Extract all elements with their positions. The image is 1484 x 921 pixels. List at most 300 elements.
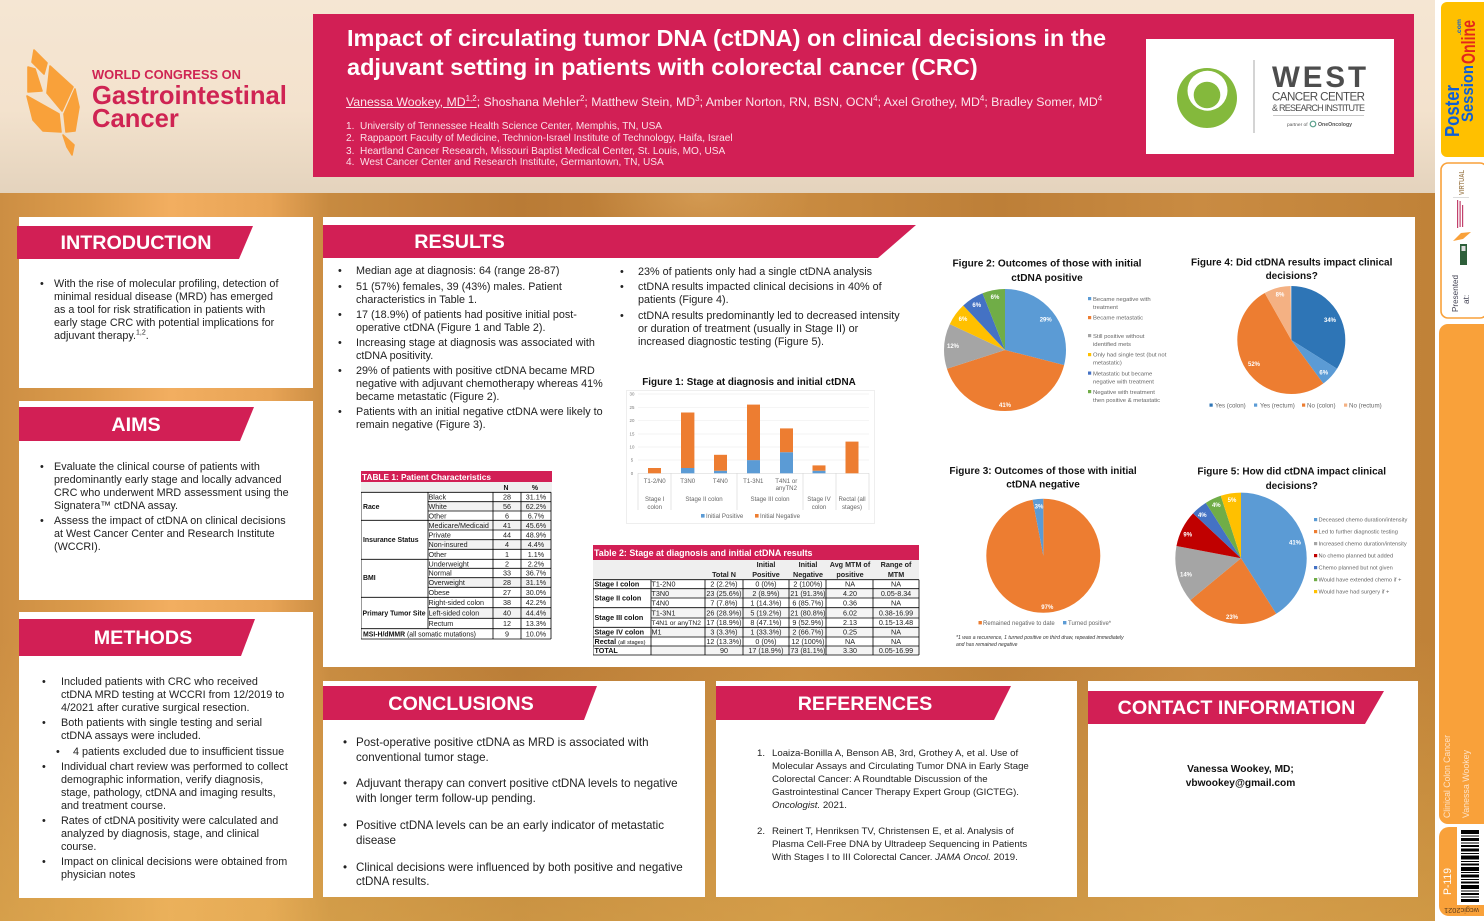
- table 1: patient characteristics: Black: [428, 493, 446, 502]
- text: results left column: ctDNA positivity.: [356, 350, 433, 362]
- logo text: Gastrointestinal: [92, 82, 287, 110]
- chart: figure 3 pie: and has remained negative: [956, 642, 1018, 648]
- chart: figure 1 stacked bars: T1-3N1: [743, 478, 764, 485]
- logo: World Congress on Gastrointestinal Cancer: [26, 49, 287, 156]
- table 1: patient characteristics: Right-sided colon: [428, 598, 484, 607]
- chart: figure 1 stacked bars: 5: [631, 458, 634, 462]
- table 2: stage at diagnosis and initial ctDNA results: Initial: [757, 560, 775, 569]
- chart: figure 4 pie: No (colon): [1307, 402, 1336, 409]
- text: methods: •: [42, 856, 46, 868]
- text: conclusions: Positive ctDNA levels can be an early indicator of metastatic: [356, 819, 664, 832]
- text: results left column: •: [338, 406, 342, 418]
- chart: figure 1 stacked bars: T3N0: [680, 478, 696, 485]
- chart: figure 4 pie: Yes (colon): [1215, 402, 1246, 409]
- affiliations: [346, 121, 733, 168]
- chart: figure 2 pie: identified mets: [1093, 342, 1131, 348]
- table 1: patient characteristics: 4: [505, 540, 509, 549]
- text: references: Colorectal Cancer: A Roundtable Discussion of the: [772, 774, 988, 785]
- top banner background: [0, 0, 1484, 193]
- tab: poster session online: Session: [1458, 65, 1477, 122]
- table 1: patient characteristics: Insurance Status: [363, 537, 419, 544]
- table 1: patient characteristics: Other: [428, 511, 447, 520]
- chart: figure 1 stacked bars: 25: [630, 405, 635, 410]
- chart: figure 4 pie: 6%: [1319, 370, 1329, 376]
- table 1: patient characteristics: N: [504, 485, 509, 492]
- table 2: stage at diagnosis and initial ctDNA results: 0.38-16.99: [879, 608, 913, 617]
- chart: figure 5 pie: 14%: [1180, 572, 1193, 578]
- text: contact details: vbwookey@gmail.com: [1186, 778, 1295, 789]
- text: methods: [42, 676, 288, 881]
- text: results left column: negative with adjuvant chemotherapy whereas 41%: [356, 378, 603, 390]
- title: adjuvant setting in patients with colorectal cancer (CRC): [347, 54, 978, 80]
- text: contact details: [1186, 764, 1295, 789]
- table 2: stage at diagnosis and initial ctDNA results: M1: [652, 628, 662, 637]
- text: methods: •: [42, 717, 46, 729]
- table 2: stage at diagnosis and initial ctDNA results: 1 (14.3%): [750, 598, 782, 607]
- table 2: stage at diagnosis and initial ctDNA results: Positive: [752, 570, 780, 579]
- chart: figure 2 pie: 12%: [947, 344, 960, 350]
- text: conclusions: ctDNA results.: [356, 875, 429, 888]
- table 2: stage at diagnosis and initial ctDNA results: 2 (66.7%): [792, 628, 824, 637]
- text: results left column: characteristics in Table 1.: [356, 294, 477, 306]
- chart: figure 5 pie: Chemo planned but not given: [1318, 566, 1393, 572]
- chart: figure 3 pie: [949, 466, 1137, 648]
- text: methods: •: [42, 676, 46, 688]
- text: results left column: operative ctDNA (Figure 1 and Table 2).: [356, 322, 545, 334]
- table 2: stage at diagnosis and initial ctDNA results: T4N1 or anyTN2: [652, 620, 701, 627]
- table 2: stage at diagnosis and initial ctDNA results: 3.30: [843, 646, 857, 655]
- text: introduction: With the rise of molecular profiling, detection of: [54, 278, 278, 290]
- table 2: stage at diagnosis and initial ctDNA results: 0.05-8.34: [881, 589, 911, 598]
- chart: figure 2 pie: [944, 258, 1167, 411]
- chart: figure 3 pie: 97%: [1041, 605, 1054, 611]
- chart: figure 1 stacked bars: 15: [630, 432, 635, 436]
- chart: figure 5 pie: decisions?: [1266, 481, 1318, 492]
- table 2: stage at diagnosis and initial ctDNA results: 1 (33.3%): [750, 628, 782, 637]
- table 1: patient characteristics: Race: [363, 504, 380, 511]
- table 2: stage at diagnosis and initial ctDNA results: 4.20: [843, 589, 857, 598]
- table 1: patient characteristics: 48.9%: [526, 530, 547, 540]
- table 1: patient characteristics: Other: [428, 550, 447, 559]
- text: references: [757, 748, 1029, 863]
- text: results left column: Patients with an initial negative ctDNA were likely to: [356, 406, 603, 418]
- table 2: stage at diagnosis and initial ctDNA results: MTM: [888, 570, 904, 579]
- text: references: 1.: [757, 748, 765, 759]
- table 1: patient characteristics: 41: [503, 521, 511, 530]
- table 1: patient characteristics: 1.1%: [528, 550, 545, 559]
- table 1: patient characteristics: 38: [503, 598, 511, 607]
- table 2: stage at diagnosis and initial ctDNA results: NA: [891, 628, 901, 637]
- table 2: stage at diagnosis and initial ctDNA results: NA: [845, 580, 855, 589]
- text: methods: analyzed by diagnosis, stage, and clinical: [61, 828, 259, 840]
- text: conclusions: with longer term follow-up pending.: [356, 792, 536, 804]
- table 2: stage at diagnosis and initial ctDNA results: 8 (47.1%): [750, 618, 782, 627]
- heading: introduction: INTRODUCTION: [61, 232, 211, 254]
- table 2: stage at diagnosis and initial ctDNA results: 2 (2.2%): [710, 580, 738, 589]
- logo: West Cancer Center: WEST: [1272, 61, 1366, 94]
- tab: poster session online: Poster: [1442, 85, 1464, 137]
- chart: figure 2 pie: Figure 2: Outcomes of those with initial: [952, 258, 1142, 270]
- table 1: patient characteristics: 28: [503, 493, 511, 502]
- heading: contact information: CONTACT INFORMATION: [1118, 697, 1355, 719]
- text: aims: Assess the impact of ctDNA on clinical decisions: [54, 515, 286, 527]
- text: references: With Stages I to III Colorectal Cancer. JAMA Oncol. 2019.: [772, 852, 1018, 863]
- affiliations: 4. West Cancer Center and Research Institute, Germantown, TN, USA: [346, 157, 664, 168]
- chart legend: Initial Negative: [760, 513, 801, 520]
- chart: figure 4 pie: Figure 4: Did ctDNA results impact clinical: [1191, 258, 1393, 268]
- table 1: patient characteristics: Obese: [428, 588, 450, 597]
- text: references: Gastrointestinal Cancer Therapy Expert Group (GICTEG).: [772, 787, 1019, 798]
- chart: figure 2 pie: Became metastatic: [1093, 316, 1143, 322]
- table 1: patient characteristics: 31.1%: [526, 493, 547, 502]
- table 1: patient characteristics: 36.7%: [526, 569, 547, 578]
- chart: figure 4 pie: No (rectum): [1349, 402, 1382, 409]
- chart: figure 5 pie: Would have extended chemo if +: [1318, 578, 1402, 584]
- chart: figure 4 pie: 34%: [1324, 318, 1337, 324]
- table 2: stage at diagnosis and initial ctDNA results: 0.25: [843, 628, 857, 637]
- table 2: stage at diagnosis and initial ctDNA results: 26 (28.9%): [706, 608, 742, 617]
- text: methods: ctDNA assays were included.: [61, 730, 201, 742]
- chart: figure 5 pie: 4%: [1198, 513, 1207, 519]
- table 1: patient characteristics: Primary Tumor Site: [362, 610, 426, 618]
- text: introduction: [40, 278, 278, 342]
- table 2: stage at diagnosis and initial ctDNA results: 12 (13.3%): [706, 637, 742, 646]
- text: introduction: as a tool for risk stratification in patients with: [54, 304, 265, 316]
- table 1: patient characteristics: 30.0%: [526, 588, 547, 597]
- text: references: Reinert T, Henriksen TV, Christensen E, et al. Analysis of: [772, 826, 1014, 837]
- table 1: patient characteristics: Medicare/Medicaid: [428, 521, 489, 530]
- text: results right column: 23% of patients only had a single ctDNA analysis: [638, 266, 872, 278]
- chart: figure 1 stacked bars: [626, 377, 875, 524]
- panel: aims: [19, 401, 313, 600]
- tab: poster number and barcode: wcgic2021: [1444, 906, 1480, 915]
- table 1: patient characteristics: 4.4%: [528, 540, 545, 549]
- table 2: stage at diagnosis and initial ctDNA results: [593, 545, 920, 656]
- table 2: stage at diagnosis and initial ctDNA results: NA: [891, 580, 901, 589]
- chart: figure 5 pie: [1175, 466, 1408, 624]
- text: methods: 4/2021 after curative surgical resection.: [61, 702, 249, 714]
- logo: West Cancer Center: CANCER CENTER: [1272, 90, 1365, 104]
- table 2: stage at diagnosis and initial ctDNA results: 7 (7.8%): [710, 598, 738, 607]
- text: results right column: increased diagnostic testing (Figure 5).: [638, 336, 824, 348]
- heading: conclusions: CONCLUSIONS: [388, 693, 534, 715]
- text: results left column: became metastatic (Figure 2).: [356, 391, 499, 403]
- table 2: stage at diagnosis and initial ctDNA results: Table 2: Stage at diagnosis and initial ctDNA results: [594, 548, 813, 558]
- table 1: patient characteristics: MSI-H/dMMR (all somatic mutations): [363, 631, 476, 638]
- chart: figure 2 pie: 6%: [991, 295, 1000, 301]
- text: references: Plasma Cell-Free DNA by Ultradeep Sequencing in Patients: [772, 839, 1027, 850]
- text: conclusions: •: [343, 777, 347, 790]
- table 2: stage at diagnosis and initial ctDNA results: 0 (0%): [755, 637, 777, 646]
- chart legend: [701, 513, 801, 520]
- chart: figure 2 pie: treatment: [1093, 305, 1118, 311]
- table 1: patient characteristics: 45.6%: [526, 521, 547, 530]
- table 1: patient characteristics: 6.7%: [528, 511, 545, 520]
- tab: presented at virtual congress: at:: [1461, 295, 1471, 304]
- table 2: stage at diagnosis and initial ctDNA results: NA: [845, 637, 855, 646]
- text: conclusions: disease: [356, 834, 396, 846]
- table 2: stage at diagnosis and initial ctDNA results: 6 (85.7%): [792, 598, 824, 607]
- chart: figure 1 stacked bars: T4N0: [713, 478, 728, 485]
- table 1: patient characteristics: 56: [503, 502, 511, 511]
- table 1: patient characteristics: Non-insured: [428, 540, 468, 549]
- table 2: stage at diagnosis and initial ctDNA results: NA: [891, 598, 901, 607]
- table 2: stage at diagnosis and initial ctDNA results: Stage I colon: [594, 580, 639, 589]
- text: session and author: Vanessa Wookey: [1461, 750, 1472, 818]
- logo: West Cancer Center: [1146, 39, 1394, 154]
- chart: figure 2 pie: Became negative with: [1093, 297, 1151, 303]
- table 1: patient characteristics: 28: [503, 578, 511, 587]
- table 2: stage at diagnosis and initial ctDNA results: TOTAL: [594, 646, 618, 655]
- table 2: stage at diagnosis and initial ctDNA results: 23 (25.6%): [706, 589, 742, 598]
- logo: West Cancer Center: OneOncology: [1318, 122, 1352, 128]
- table 2: stage at diagnosis and initial ctDNA results: NA: [891, 637, 901, 646]
- chart: figure 1 stacked bars: 0: [631, 471, 634, 476]
- chart: figure 5 pie: 4%: [1212, 503, 1221, 509]
- title: Impact of circulating tumor DNA (ctDNA) on clinical decisions in the: [347, 25, 1106, 51]
- chart: figure 5 pie: Figure 5: How did ctDNA impact clinical: [1197, 466, 1386, 478]
- chart: figure 3 pie: Remained negative to date: [983, 621, 1055, 627]
- text: results right column: patients (Figure 4).: [638, 294, 729, 306]
- table 1: patient characteristics: 44: [503, 530, 511, 540]
- chart: figure 1 stacked bars: T1-2/N0: [644, 478, 666, 485]
- panel: results: [323, 217, 1415, 667]
- text: conclusions: •: [343, 736, 347, 749]
- table 2: stage at diagnosis and initial ctDNA results: Stage IV colon: [594, 628, 644, 637]
- table 2: stage at diagnosis and initial ctDNA results: Stage II colon: [594, 594, 641, 602]
- table 1: patient characteristics: TABLE 1: Patient Characteristics: [362, 472, 491, 482]
- panel: references: [716, 681, 1077, 897]
- chart: figure 1 stacked bars: 30: [630, 392, 635, 396]
- chart: figure 3 pie: Turned positive*: [1068, 621, 1112, 627]
- logo: West Cancer Center: partner of: [1287, 122, 1308, 128]
- table 2: stage at diagnosis and initial ctDNA results: Avg MTM of: [830, 560, 871, 569]
- text: aims: (WCCRI).: [54, 541, 101, 553]
- table 2: stage at diagnosis and initial ctDNA results: 0.36: [843, 598, 857, 607]
- heading: aims: [19, 407, 254, 441]
- chart: figure 5 pie: Deceased chemo duration/intensity: [1318, 518, 1407, 524]
- text: conclusions: [343, 736, 683, 888]
- table 2: stage at diagnosis and initial ctDNA results: 6.02: [843, 608, 857, 617]
- title: [347, 25, 1106, 80]
- text: aims: Evaluate the clinical course of patients with: [54, 461, 260, 473]
- text: aims: [40, 461, 289, 553]
- chart: figure 4 pie: 8%: [1276, 292, 1285, 298]
- title banner: [313, 14, 1414, 177]
- table 2: stage at diagnosis and initial ctDNA results: 9 (52.9%): [792, 618, 824, 627]
- table 2: stage at diagnosis and initial ctDNA results: 2 (100%): [793, 580, 823, 589]
- chart: figure 2 pie: metastatic): [1093, 361, 1122, 367]
- text: session and author: [1442, 734, 1472, 818]
- chart: figure 1 stacked bars: Stage II colon: [685, 496, 723, 503]
- chart: figure 2 pie: 6%: [972, 303, 982, 309]
- table 1: patient characteristics: %: [532, 485, 538, 492]
- chart: figure 1 stacked bars: Rectal (all: [838, 496, 866, 503]
- text: aims: at West Cancer Center and Research Institute: [54, 528, 275, 540]
- sidebar: [1435, 0, 1484, 921]
- panel: conclusions: [323, 681, 705, 897]
- text: methods: •: [42, 815, 46, 827]
- text: aims: Signatera™ ctDNA assay.: [54, 500, 178, 512]
- table 2: stage at diagnosis and initial ctDNA results: T1-3N1: [652, 608, 675, 617]
- table 1: patient characteristics: 2.2%: [528, 559, 545, 568]
- text: results left column: •: [338, 337, 342, 349]
- chart: figure 5 pie: Led to further diagnostic testing: [1318, 530, 1398, 536]
- text: results right column: or duration of treatment (usually in Stage II) or: [638, 323, 858, 335]
- table 2: stage at diagnosis and initial ctDNA results: T3N0: [652, 589, 669, 598]
- table 1: patient characteristics: 40: [503, 608, 511, 618]
- table 1: patient characteristics: 27: [503, 588, 511, 597]
- table 2: stage at diagnosis and initial ctDNA results: 0.15-13.48: [879, 618, 913, 627]
- table 2: stage at diagnosis and initial ctDNA results: 90: [720, 646, 728, 655]
- table 2: stage at diagnosis and initial ctDNA results: 21 (80.8%): [790, 608, 826, 617]
- chart: figure 1 stacked bars: Stage III colon: [751, 496, 789, 503]
- text: results right column: •: [620, 310, 624, 322]
- table 2: stage at diagnosis and initial ctDNA results: 21 (91.3%): [790, 589, 826, 598]
- chart: figure 1 stacked bars: T4N1 or: [775, 478, 797, 485]
- table 2: stage at diagnosis and initial ctDNA results: T1-2N0: [652, 580, 675, 589]
- table 1: patient characteristics: Underweight: [428, 559, 469, 568]
- text: methods: Impact on clinical decisions were obtained from: [61, 856, 287, 868]
- chart: figure 2 pie: Only had single test (but not: [1093, 353, 1167, 359]
- text: results left column: [338, 265, 603, 431]
- heading: results: [323, 225, 916, 258]
- text: introduction: •: [40, 278, 44, 290]
- affiliations: 2. Rappaport Faculty of Medicine, Technion-Israel Institute of Technology, Haifa, Israel: [346, 133, 733, 144]
- text: aims: predominantly early stage and locally advanced: [54, 474, 281, 486]
- table 1: patient characteristics: Private: [428, 530, 451, 540]
- text: results left column: 29% of patients with positive ctDNA became MRD: [356, 365, 595, 377]
- table 2: stage at diagnosis and initial ctDNA results: 0 (0%): [755, 580, 777, 589]
- heading: references: [716, 686, 1011, 720]
- text: results right column: •: [620, 266, 624, 278]
- table 1: patient characteristics: 2: [505, 559, 509, 568]
- text: methods: and treatment course.: [61, 800, 166, 812]
- text: contact details: Vanessa Wookey, MD;: [1187, 764, 1294, 775]
- table 1: patient characteristics: Overweight: [428, 578, 465, 587]
- text: methods: physician notes: [61, 869, 135, 881]
- chart: figure 5 pie: 23%: [1226, 615, 1239, 621]
- table 2: stage at diagnosis and initial ctDNA results: 2.13: [843, 618, 857, 627]
- chart: figure 1 stacked bars: colon: [812, 504, 826, 511]
- table 1: patient characteristics: Normal: [428, 569, 452, 578]
- tab: poster session online: .com: [1457, 19, 1463, 35]
- table 2: stage at diagnosis and initial ctDNA results: 17 (18.9%): [706, 618, 742, 627]
- text: methods: 4 patients excluded due to insufficient tissue: [73, 746, 284, 758]
- text: references: Loaiza-Bonilla A, Benson AB, 3rd, Grothey A, et al. Use of: [772, 748, 1018, 759]
- table 2: stage at diagnosis and initial ctDNA results: Rectal (all stages): [594, 637, 646, 646]
- chart: figure 2 pie: negative with treatment: [1093, 379, 1154, 385]
- table 1: patient characteristics: 1: [505, 550, 509, 559]
- table 2: stage at diagnosis and initial ctDNA results: T4N0: [652, 598, 669, 607]
- text: introduction: minimal residual disease (MRD) has emerged: [54, 291, 273, 303]
- chart: figure 1 stacked bars: 10: [630, 444, 635, 450]
- icon: orange leaf: [26, 49, 80, 156]
- chart: figure 4 pie: 52%: [1248, 362, 1261, 368]
- heading: contact information: [1088, 691, 1384, 724]
- chart: figure 2 pie: Still positive without: [1093, 334, 1145, 340]
- table 2: stage at diagnosis and initial ctDNA results: Negative: [793, 570, 823, 579]
- table 1: patient characteristics: 12: [503, 619, 511, 628]
- table 1: patient characteristics: 44.4%: [526, 608, 547, 618]
- heading: aims: AIMS: [111, 414, 161, 436]
- chart: figure 5 pie: 9%: [1183, 532, 1193, 538]
- text: conclusions: Adjuvant therapy can convert positive ctDNA levels to negative: [356, 777, 678, 790]
- chart: figure 1 stacked bars: 20: [630, 418, 635, 423]
- chart: figure 2 pie: 41%: [999, 403, 1012, 409]
- text: methods: Individual chart review was performed to collect: [61, 761, 288, 773]
- text: results right column: [620, 266, 900, 348]
- table 2: stage at diagnosis and initial ctDNA results: 5 (19.2%): [750, 608, 782, 617]
- text: conclusions: •: [343, 819, 347, 832]
- chart title: Figure 1: Stage at diagnosis and initial ctDNA: [642, 377, 856, 388]
- chart: figure 5 pie: Increased chemo duration/intensity: [1318, 542, 1407, 548]
- table 1: patient characteristics: 13.3%: [526, 619, 547, 628]
- text: conclusions: Post-operative positive ctDNA as MRD is associated with: [356, 736, 649, 749]
- tab: presented at virtual congress: [1440, 162, 1484, 319]
- table 1: patient characteristics: 42.2%: [526, 598, 547, 607]
- chart: figure 4 pie: decisions?: [1266, 271, 1318, 282]
- text: methods: stage, pathology, ctDNA and imaging results,: [61, 787, 276, 799]
- tab: presented at virtual congress: VIRTUAL: [1459, 169, 1466, 195]
- table 1: patient characteristics: 9: [505, 629, 509, 638]
- tab: poster session online: [1441, 2, 1484, 157]
- heading: methods: METHODS: [94, 627, 192, 649]
- text: conclusions: Clinical decisions were influenced by both positive and negative: [356, 861, 683, 874]
- text: aims: •: [40, 461, 44, 473]
- text: methods: Both patients with single testing and serial: [61, 717, 262, 729]
- chart: figure 5 pie: Would have had surgery if +: [1318, 590, 1390, 596]
- chart: figure 1 stacked bars: Stage IV: [807, 496, 832, 503]
- table 1: patient characteristics: 31.1%: [526, 578, 547, 587]
- heading: introduction: [17, 226, 253, 259]
- table 2: stage at diagnosis and initial ctDNA results: 0.05-16.99: [879, 646, 913, 655]
- chart: figure 3 pie: Figure 3: Outcomes of those with initial: [949, 466, 1137, 477]
- table 2: stage at diagnosis and initial ctDNA results: Total N: [712, 570, 736, 579]
- table 2: stage at diagnosis and initial ctDNA results: Range of: [881, 560, 912, 569]
- chart: figure 3 pie: *1 was a recurrence, 1 turned positive on third draw, repeated immediately: [956, 635, 1124, 641]
- table 2: stage at diagnosis and initial ctDNA results: 17 (18.9%): [748, 646, 784, 655]
- heading: references: REFERENCES: [798, 693, 932, 715]
- chart: figure 2 pie: 29%: [1040, 318, 1052, 324]
- text: introduction: adjuvant therapy.1,2.: [54, 329, 149, 342]
- text: results left column: •: [338, 265, 342, 277]
- chart: figure 2 pie: Negative with treatment: [1093, 390, 1155, 396]
- text: references: Molecular Assays and Circulating Tumor DNA in Early Stage: [772, 761, 1029, 772]
- chart: figure 4 pie: Yes (rectum): [1260, 402, 1295, 409]
- tab: poster number and barcode: [1439, 827, 1484, 916]
- table 1: patient characteristics: 33: [503, 569, 511, 578]
- affiliations: 1. University of Tennessee Health Science Center, Memphis, TN, USA: [346, 121, 662, 132]
- panel: contact information: [1088, 681, 1418, 897]
- text: results left column: 51 (57%) females, 39 (43%) males. Patient: [356, 281, 562, 293]
- chart: figure 2 pie: ctDNA positive: [1011, 273, 1083, 284]
- chart: figure 1 stacked bars: colon: [647, 504, 662, 511]
- logo text: WORLD CONGRESS ON: [92, 67, 241, 82]
- table 1: patient characteristics: White: [428, 502, 447, 511]
- text: results left column: •: [338, 309, 342, 321]
- text: results right column: •: [620, 281, 624, 293]
- text: results left column: remain negative (Figure 3).: [356, 419, 486, 431]
- tab: session and presenter: [1439, 324, 1484, 824]
- chart: figure 2 pie: Metastatic but became: [1093, 371, 1153, 377]
- table 1: patient characteristics: BMI: [363, 575, 376, 582]
- logo text: Cancer: [92, 105, 179, 133]
- table 2: stage at diagnosis and initial ctDNA results: 12 (100%): [791, 637, 825, 646]
- text: references: Oncologist. 2021.: [772, 800, 847, 811]
- heading: results: RESULTS: [414, 231, 505, 253]
- table 2: stage at diagnosis and initial ctDNA results: positive: [836, 570, 864, 579]
